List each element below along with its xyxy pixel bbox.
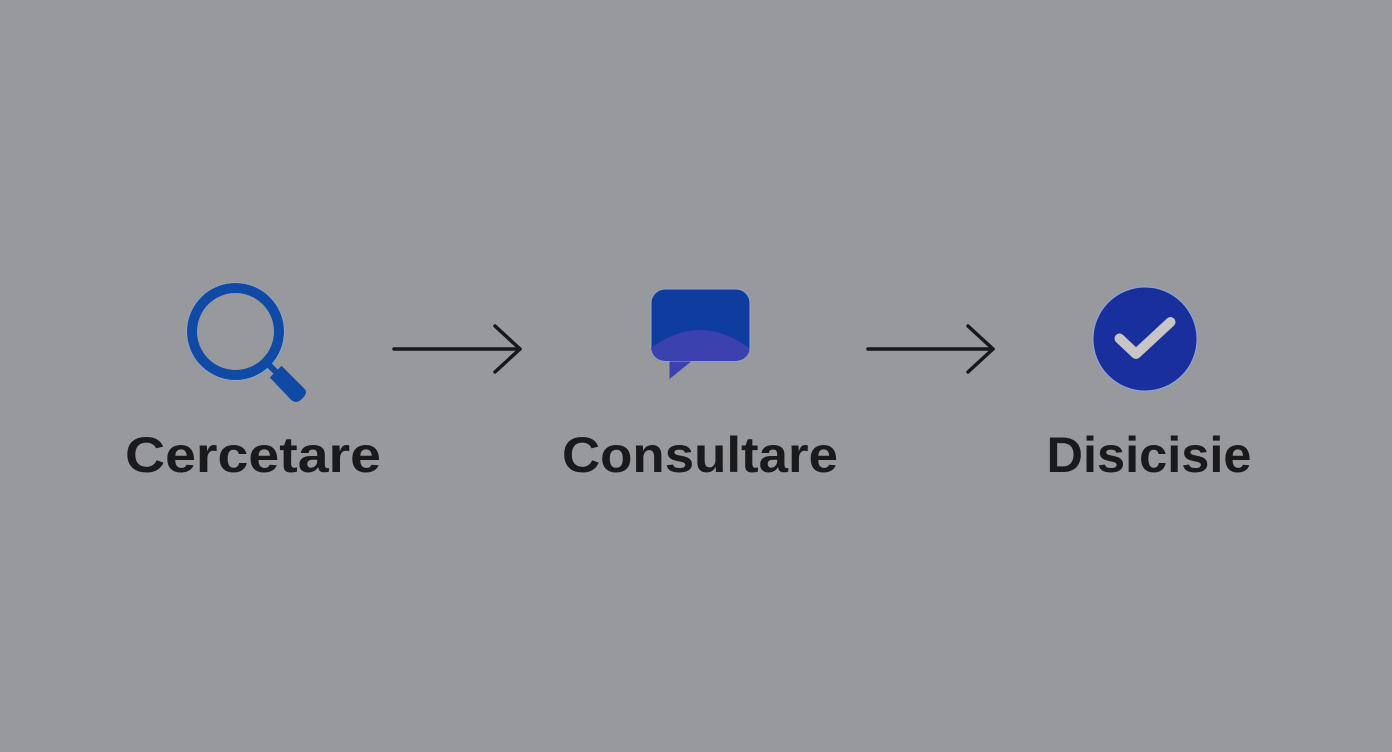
label: Disicisie: Disicisie [1046,427,1252,483]
label: Consultare: Consultare [562,427,838,483]
arrow: research to consultation [394,326,520,372]
icon: magnifying glass [187,283,306,402]
icon: speech bubble [649,289,752,379]
arrow: consultation to decision [868,326,993,372]
label: Cercetare: Cercetare [125,427,381,483]
process flow diagram [127,282,1250,472]
icon: check mark badge [1093,287,1197,391]
